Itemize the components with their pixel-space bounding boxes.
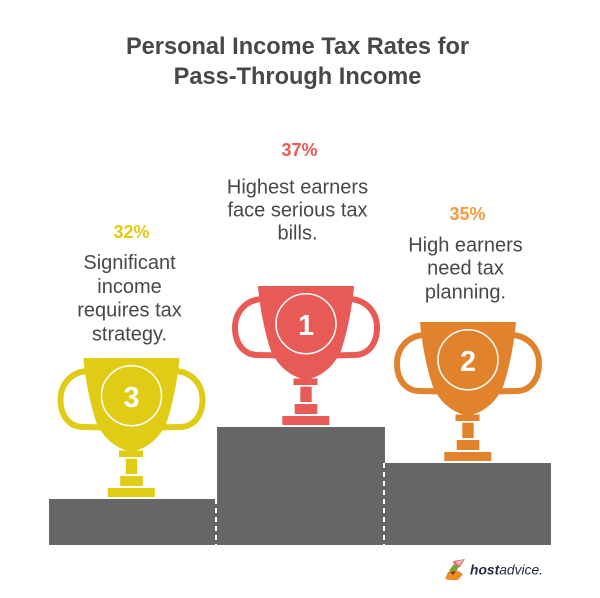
text: highest earners: face serious tax <box>227 200 368 222</box>
trophy: third place <box>60 358 202 497</box>
label: 35%: 35% <box>449 204 486 224</box>
text: high earners: need tax <box>427 258 504 280</box>
text: highest earners: bills. <box>277 222 318 244</box>
text: high earners: High earners <box>408 234 523 256</box>
trophy: second place <box>397 322 539 461</box>
text: significant income: requires tax <box>77 300 182 322</box>
text: significant income: strategy. <box>92 324 167 346</box>
label: 37%: 37% <box>281 140 318 160</box>
text: significant income: income <box>97 276 162 298</box>
text: highest earners <box>227 176 368 244</box>
trophy: second place: 2 <box>460 346 476 378</box>
trophy: third place: 3 <box>124 382 139 414</box>
text: high earners <box>408 234 523 304</box>
text: highest earners: Highest earners <box>227 176 368 198</box>
text: significant income <box>77 252 182 346</box>
podium <box>49 427 551 545</box>
title <box>126 34 469 90</box>
trophy: first place: 1 <box>298 310 314 342</box>
logo: hostadvice <box>445 559 543 580</box>
title: Personal Income Tax Rates for <box>126 34 469 60</box>
title: Pass-Through Income <box>174 64 421 90</box>
text: significant income: Significant <box>83 252 176 274</box>
wordmark: hostadvice. <box>470 562 543 578</box>
icon: hostadvice mascot <box>445 559 465 580</box>
trophy: first place <box>235 286 377 425</box>
label: 32%: 32% <box>113 222 150 242</box>
text: high earners: planning. <box>425 282 506 304</box>
